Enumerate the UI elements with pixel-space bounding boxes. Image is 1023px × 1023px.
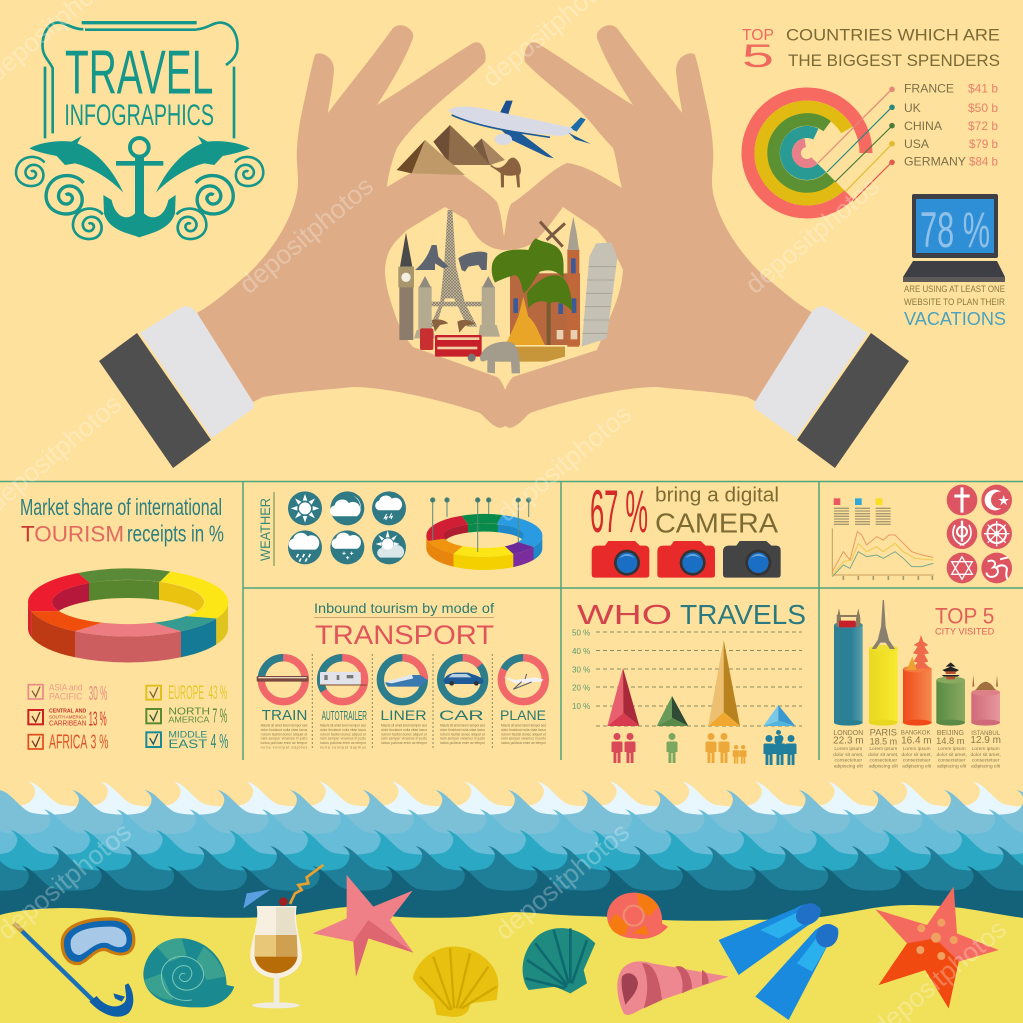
item: train: TRAIN xyxy=(262,707,307,724)
city label: Bangkok: 16.4 m xyxy=(901,735,932,746)
heading: TOP 5: TOP xyxy=(742,27,774,44)
badge frame xyxy=(43,23,237,138)
panel: transport xyxy=(257,600,553,749)
icon: couple xyxy=(612,733,636,763)
item: train xyxy=(257,656,308,749)
icon: pink starfish xyxy=(313,875,413,977)
city label: Beijing: adipiscing elit xyxy=(937,763,967,769)
market heading: TOURISM xyxy=(21,522,124,546)
spend values: $72 b xyxy=(968,119,998,133)
palms xyxy=(492,238,573,345)
landmarks illustration xyxy=(397,101,617,373)
spend values: $50 b xyxy=(968,101,998,115)
panel: digital camera: 67 % xyxy=(590,478,648,545)
beach items right xyxy=(523,887,999,1020)
watermarks: depositphotos xyxy=(233,171,379,300)
transport items xyxy=(257,650,553,749)
city label: Paris: consectetuer xyxy=(870,758,898,764)
logo title: TRAVEL: TRAVEL xyxy=(65,38,213,107)
item: autotrailer: luctus pulvinar enim ac tempor xyxy=(320,741,367,745)
legend: Middle East: EAST xyxy=(168,737,208,751)
panel: digital camera xyxy=(590,478,781,578)
cities heading: TOP 5 xyxy=(935,603,994,628)
city label: London: dolor sit amet, xyxy=(833,752,863,758)
country names: USA xyxy=(904,137,929,151)
camera heading: bring a digital xyxy=(655,484,779,506)
icon: star of David xyxy=(947,553,977,583)
legend: Central and South America xyxy=(28,708,107,730)
kangaroos xyxy=(432,319,475,333)
heading: TOP 5: 5 xyxy=(742,38,774,74)
country names: UK xyxy=(904,101,921,115)
legend: North America: NORTH xyxy=(168,706,210,717)
chart axis labels: 50 % xyxy=(572,628,590,638)
item: liner: luctus pulvinar enim ac tempor xyxy=(381,741,428,745)
item: liner: Mauris sit amet lorem tempor sed xyxy=(381,724,427,728)
country names: FRANCE xyxy=(904,82,954,96)
line chart xyxy=(832,498,934,580)
city label: Bangkok xyxy=(901,730,932,769)
icon: rain xyxy=(288,530,322,564)
transport heading: TRANSPORT xyxy=(315,620,494,650)
icon: anchor xyxy=(103,138,176,237)
upper window between fingers xyxy=(387,30,622,237)
heart window xyxy=(385,207,623,390)
item: autotrailer: Mauris sit amet lorem tempor sed xyxy=(320,724,366,728)
airplane xyxy=(448,101,591,158)
icon: teal scallop xyxy=(523,928,595,993)
legend: Africa: 3 % xyxy=(91,731,108,753)
icon: orange shell xyxy=(607,893,668,939)
cylinder: Beijing xyxy=(936,662,965,726)
item: plane: PLANE xyxy=(500,707,546,723)
panel: heart hands xyxy=(99,25,909,468)
city label: Istanbul: consectetuer xyxy=(972,758,1000,764)
camera heading: CAMERA xyxy=(655,508,778,538)
item: autotrailer: AUTOTRAILER xyxy=(322,709,367,723)
icon: sun xyxy=(288,491,322,525)
spend values: $41 b xyxy=(968,82,998,96)
legend: Europe: EUROPE xyxy=(168,683,204,704)
text: 7 % xyxy=(212,706,227,728)
icons: three cameras xyxy=(592,541,781,578)
elephant xyxy=(480,342,520,373)
country names: GERMANY xyxy=(904,154,966,168)
ocean waves xyxy=(0,782,1023,921)
3D ring chart xyxy=(426,514,542,570)
heading: TOP 5 xyxy=(742,27,774,74)
city label: Istanbul: adipiscing elit xyxy=(971,763,1001,769)
legend: Asia and Pacific: PACIFIC xyxy=(49,691,83,701)
laptop caption: ARE USING AT LEAST ONE xyxy=(904,284,1005,294)
item: plane: luctus pulvinar enim ac tempor xyxy=(501,741,547,745)
item: plane: nam semper vivamus in justo xyxy=(501,737,546,741)
item: car xyxy=(439,658,486,745)
city label: Paris xyxy=(868,728,898,769)
chart axis labels: 10 % xyxy=(572,702,590,711)
pyramid: family xyxy=(708,640,740,726)
leader dots xyxy=(889,86,895,165)
icon: family xyxy=(706,733,747,764)
city label: Bangkok: adipiscing elit xyxy=(902,763,932,769)
pyramid: couples xyxy=(607,668,639,726)
item: liner xyxy=(380,658,428,745)
concentric ring chart xyxy=(748,94,866,212)
legend: Africa: AFRICA xyxy=(49,731,88,753)
transport subheading: Inbound tourism by mode of xyxy=(314,600,494,616)
icon: cloud and lightning xyxy=(372,491,406,525)
city label: Bangkok: BANGKOK xyxy=(901,730,930,736)
spend values: $79 b xyxy=(969,137,998,151)
panel: weather xyxy=(258,491,542,570)
phone booth and double-decker bus xyxy=(420,328,482,362)
panel: who travels xyxy=(572,599,806,765)
logo subtitle: INFOGRAPHICS: INFOGRAPHICS xyxy=(64,99,214,132)
sand beach xyxy=(0,905,1023,1023)
legend: Central and South America: CARRIBEAN xyxy=(49,719,86,728)
icon: orange starfish xyxy=(875,887,999,1008)
item: autotrailer: rutrum facilisi donec aliquet et xyxy=(320,732,366,736)
Eiffel Tower xyxy=(430,210,477,327)
left hand xyxy=(197,25,506,428)
legend: Central and South America: SOUTH AMERICA xyxy=(49,714,87,719)
city label: London: consectetuer xyxy=(835,758,863,764)
right hand xyxy=(504,25,813,428)
heading: countries xyxy=(786,26,1000,70)
text: 43 % xyxy=(208,683,227,704)
item: car: CAR xyxy=(439,707,484,723)
chart axis labels: 40 % xyxy=(572,647,590,656)
item: autotrailer xyxy=(313,650,373,749)
panel: top 5 cities xyxy=(833,600,1001,769)
market legend xyxy=(28,683,228,753)
city label: Beijing: consectetuer xyxy=(938,758,966,764)
icon: left fin xyxy=(719,899,824,975)
pyramids xyxy=(397,125,505,175)
city label: Beijing: BEIJING xyxy=(937,730,964,737)
item: train: dolor tincidunt nulla vitae lacus xyxy=(261,728,308,732)
panel: top 5 spenders xyxy=(742,26,1000,212)
golden pagoda xyxy=(498,297,565,362)
city label: Istanbul: ISTANBUL xyxy=(971,731,1001,737)
icon: cocktail xyxy=(243,865,323,1008)
item: liner: LINER xyxy=(380,707,427,723)
icon: cloud and moon xyxy=(330,491,364,525)
chart pins xyxy=(430,498,531,552)
caption: VACATIONS: VACATIONS xyxy=(904,309,1006,329)
who travels heading: TRAVELS xyxy=(680,599,806,630)
who travels heading: WHO xyxy=(577,599,672,630)
item: car: dolor tincidunt nulla vitae lacus xyxy=(440,728,485,732)
icon: right fin xyxy=(755,920,842,1020)
item: car: luctus pulvinar enim ac tempor xyxy=(440,741,486,745)
right cuff xyxy=(754,306,909,468)
leaning tower of Pisa xyxy=(582,242,617,347)
legend: Middle East xyxy=(146,729,228,753)
city label: Istanbul: 12.9 m xyxy=(970,735,1001,746)
city label: London: 22.3 m xyxy=(833,736,864,747)
panel: logo badge xyxy=(16,23,263,239)
market heading: Market share of international xyxy=(20,494,222,520)
spend values: $84 b xyxy=(969,154,998,168)
Tower Bridge xyxy=(414,276,500,338)
chart axis labels xyxy=(572,628,590,711)
city label: Paris: Lorem ipsum xyxy=(869,746,897,752)
pyramid: solo xyxy=(657,696,688,726)
icon: diving mask xyxy=(61,917,135,965)
watermarks: depositphotos xyxy=(739,171,885,300)
city label: Istanbul: dolor sit amet, xyxy=(971,752,1001,758)
icon: om xyxy=(981,553,1012,583)
city label: Beijing: Lorem ipsum xyxy=(938,746,966,752)
item: plane: rutrum facilisi donec aliquet et xyxy=(501,732,546,736)
item: plane: Mauris sit amet lorem tempor sed xyxy=(501,724,546,728)
item: liner: nam semper vivamus in justo xyxy=(381,737,427,741)
icon: cross xyxy=(947,485,977,515)
item: plane: dolor tincidunt nulla vitae lacus xyxy=(501,728,546,732)
market legend: 13 % xyxy=(89,708,107,730)
item: train: rutrum facilisi donec aliquet et xyxy=(261,732,307,736)
who travels heading xyxy=(577,599,806,630)
heading: countries: COUNTRIES WHICH ARE xyxy=(786,26,1000,44)
icon: group of people xyxy=(764,730,796,765)
windmill xyxy=(540,222,565,247)
city label: London: Lorem ipsum xyxy=(834,746,862,752)
legend: North America: AMERICA xyxy=(168,715,210,724)
camera heading xyxy=(655,484,779,538)
weather label rule xyxy=(273,492,275,566)
city label: Beijing: dolor sit amet, xyxy=(937,752,967,758)
item: car: rutrum facilisi donec aliquet et xyxy=(440,732,485,736)
item: car: Mauris sit amet lorem tempor sed xyxy=(440,724,485,728)
country names xyxy=(904,82,966,168)
item: train: nulla volutpat dapibus xyxy=(261,745,308,749)
city label: Bangkok: consectetuer xyxy=(903,758,931,764)
legend: North America xyxy=(146,706,227,728)
bull runner xyxy=(415,245,487,272)
city label: London xyxy=(833,730,864,769)
country names: CHINA xyxy=(904,119,942,133)
city label: Beijing xyxy=(936,730,967,769)
city label: Istanbul: Lorem ipsum xyxy=(972,746,1000,752)
cylinder: London xyxy=(834,608,863,726)
item: liner: dolor tincidunt nulla vitae lacus xyxy=(381,728,427,732)
city label: Paris: 18.5 m xyxy=(870,736,897,746)
panel: market share xyxy=(20,494,228,753)
icon: snorkel xyxy=(14,923,133,1017)
Big Ben xyxy=(398,233,414,340)
beach items left xyxy=(14,865,498,1017)
legend: Asia and Pacific: ASIA and xyxy=(49,683,82,693)
legend: Central and South America: CENTRAL AND xyxy=(49,709,86,715)
cylinder: Bangkok xyxy=(903,635,932,726)
city label: Paris: adipiscing elit xyxy=(869,763,898,769)
icon: crescent and star xyxy=(981,485,1012,515)
city label: Bangkok: Lorem ipsum xyxy=(903,746,931,752)
icon: dharma wheel xyxy=(981,518,1012,549)
weather label: WEATHER xyxy=(258,498,273,561)
watermarks: depositphotos xyxy=(491,399,637,528)
icon: single traveller xyxy=(666,733,678,763)
leader lines xyxy=(818,89,892,201)
market heading: receipts in % xyxy=(127,520,224,546)
item: car: nam semper vivamus in justo xyxy=(440,737,485,741)
panel: religions and line chart xyxy=(832,485,1012,583)
pyramid: group xyxy=(763,705,795,726)
item: train: Mauris sit amet lorem tempor sed xyxy=(261,724,307,728)
icon: dolphins and waves xyxy=(16,136,263,239)
city label: London: LONDON xyxy=(833,730,863,737)
city label: Istanbul xyxy=(970,731,1001,769)
item: autotrailer: nulla volutpat dapibus xyxy=(320,745,366,749)
cylinder: Paris xyxy=(869,600,898,726)
icon: conch shell xyxy=(617,961,729,1015)
cylinder: Istanbul xyxy=(971,675,1000,726)
cities heading: CITY VISITED xyxy=(935,627,995,637)
city label: Paris: dolor sit amet, xyxy=(868,752,898,758)
weather icons xyxy=(288,491,406,564)
spend values xyxy=(968,82,998,168)
city label: Paris: PARIS xyxy=(870,728,897,738)
heading: countries: THE BIGGEST SPENDERS xyxy=(788,52,1000,70)
legend: Middle East: MIDDLE xyxy=(168,729,207,739)
item: autotrailer: dolor tincidunt nulla vitae lacus xyxy=(320,728,366,732)
icon: yellow scallop xyxy=(413,947,498,1017)
legend: Asia and Pacific xyxy=(28,683,107,705)
chart axis labels: 30 % xyxy=(572,665,590,674)
icon: snow xyxy=(330,530,364,564)
item: liner: rutrum facilisi donec aliquet et xyxy=(381,732,427,736)
market legend: 30 % xyxy=(89,683,107,705)
city label: Beijing: 14.8 m xyxy=(936,736,965,746)
icon: khanda xyxy=(947,518,977,549)
legend: Africa xyxy=(28,731,108,753)
legend: Europe xyxy=(146,683,227,704)
city label: London: adipiscing elit xyxy=(834,763,863,769)
market heading xyxy=(20,494,224,546)
icon: sun and cloud xyxy=(372,530,406,564)
item: autotrailer: nam semper vivamus in justo xyxy=(320,737,366,741)
watermarks: depositphotos xyxy=(489,817,635,946)
panel: laptop 78 percent xyxy=(903,194,1006,329)
3D donut chart xyxy=(28,568,228,662)
item: train: luctus pulvinar enim ac tempor xyxy=(261,741,308,745)
camel xyxy=(490,158,521,187)
item: plane xyxy=(494,650,553,745)
item: train: nam semper vivamus in justo xyxy=(261,737,307,741)
legend: Middle East: 4 % xyxy=(211,731,228,753)
church xyxy=(510,217,580,347)
chart axis labels: 20 % xyxy=(572,683,590,692)
left cuff xyxy=(99,306,254,468)
city label: Bangkok: dolor sit amet, xyxy=(902,752,932,758)
laptop caption: WEBSITE TO PLAN THEIR xyxy=(904,297,1005,307)
laptop caption xyxy=(904,284,1005,307)
icon: nautilus shell xyxy=(143,938,234,1007)
